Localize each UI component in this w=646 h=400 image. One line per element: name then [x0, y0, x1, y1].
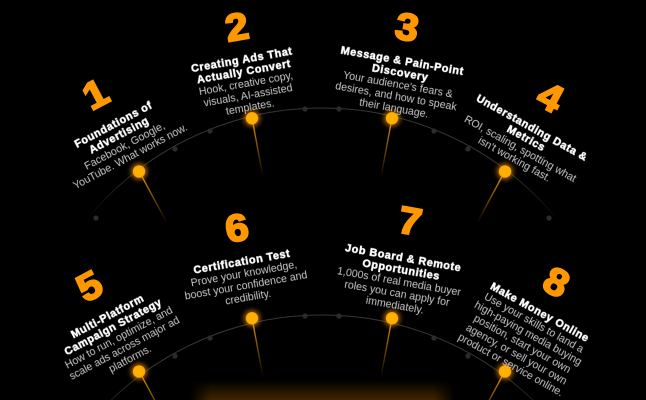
step 5 text: Multi-Platform — [69, 293, 146, 341]
step 6 number: 6 — [222, 206, 252, 252]
step 1 number: 1 — [76, 71, 116, 119]
step 3 text: Discovery — [371, 62, 429, 84]
step 7 text: immediately. — [365, 294, 425, 316]
step 8 text: product or service online. — [456, 331, 565, 399]
step 4 text: Metrics — [505, 123, 547, 154]
step 5 text: scale ads across major ad — [67, 314, 182, 383]
step 7 number: 7 — [395, 199, 425, 245]
step 8 text: agency, or sell your own — [464, 322, 569, 387]
step 5 text: How to run, optimize, and — [63, 305, 175, 371]
step 2 text: templates. — [225, 97, 275, 118]
step 3 text: their language. — [358, 96, 429, 120]
step 8 text — [456, 281, 591, 399]
step 4 number: 4 — [530, 74, 570, 122]
step 4 text: ROI, scaling, spotting what — [462, 113, 578, 185]
step 1 text: Facebook, Google, — [82, 120, 167, 173]
step 3 text — [334, 44, 465, 120]
step 2 text — [190, 46, 294, 118]
step 3 text: desires, and how to speak — [334, 80, 458, 113]
arcs, connectors and nodes — [94, 106, 553, 400]
step 8 text: position, start your own — [472, 313, 573, 376]
step 5 text: Campaign Strategy — [63, 297, 164, 358]
step 3 text: Message & Pain-Point — [340, 44, 465, 78]
step 2 text: Actually Convert — [196, 58, 292, 86]
step 4 text: isn't working fast. — [476, 135, 553, 185]
step 7 text — [336, 242, 462, 316]
step 6 text: Prove your knowledge, — [190, 258, 298, 289]
step 5 text: platforms. — [107, 343, 154, 375]
step 8 text: Make Money Online — [488, 281, 591, 345]
step 2 text: Creating Ads That — [190, 46, 293, 75]
step 2 text: Hook, creative copy, — [198, 70, 294, 98]
step 8 text: high-paying media buying — [472, 299, 584, 368]
step 1 text: YouTube. What works now. — [71, 122, 189, 192]
step 8 text: Use your skills to land a — [482, 291, 586, 356]
step 1 text: Foundations of — [72, 100, 154, 151]
step 3 number: 3 — [392, 5, 422, 51]
step 7 text: roles you can apply for — [343, 278, 450, 308]
step 6 text: Certification Test — [193, 247, 291, 276]
step 2 number: 2 — [222, 5, 252, 51]
step 7 text: Opportunities — [361, 257, 441, 282]
step 6 text — [184, 247, 308, 307]
step 7 text: 1,000s of real media buyer — [336, 265, 462, 298]
step 6 text: boost your confidence and — [184, 269, 308, 302]
step 1 text: Advertising — [87, 115, 151, 156]
step 2 text: visuals, AI-assisted — [203, 82, 293, 110]
step 4 text: Understanding Data & — [474, 93, 589, 164]
step 8 number: 8 — [536, 259, 576, 307]
step 5 number: 5 — [70, 263, 110, 311]
step 3 text: Your audience's fears & — [342, 69, 454, 100]
step 6 text: credibility. — [224, 287, 272, 307]
step 7 text: Job Board & Remote — [344, 242, 462, 274]
